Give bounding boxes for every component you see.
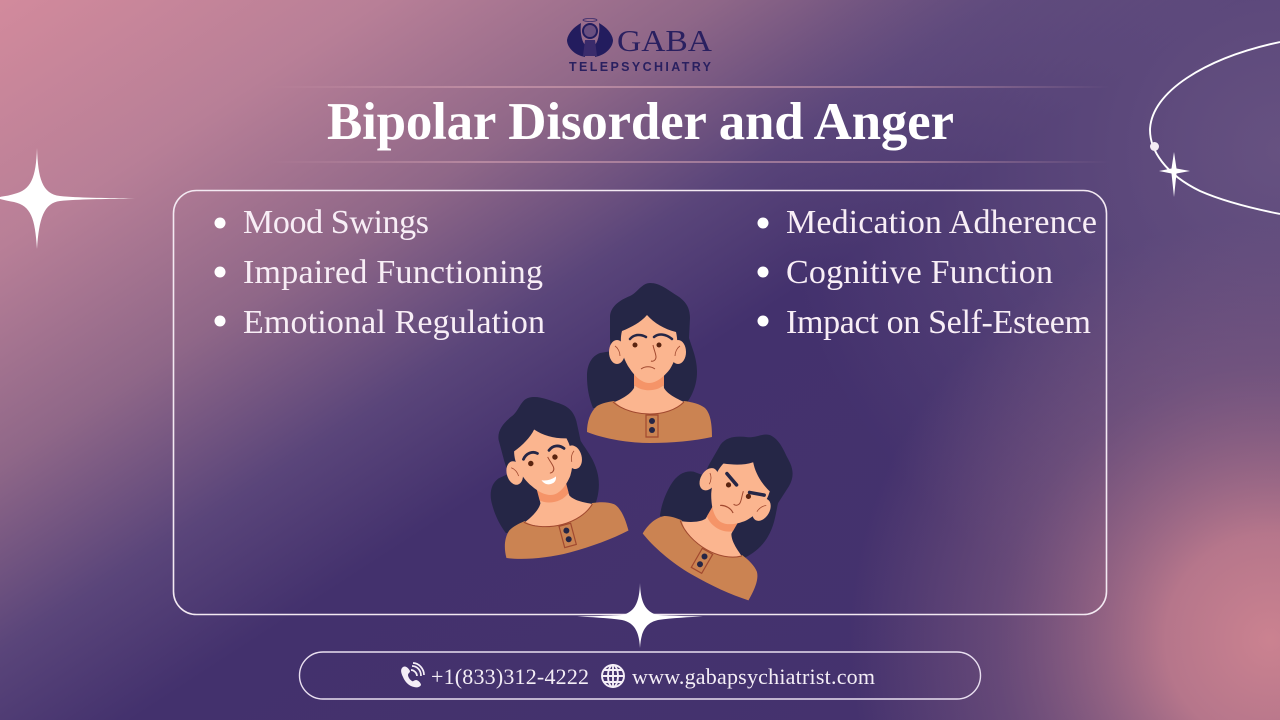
character: happy <box>468 382 630 569</box>
bullet item: Mood Swings: Mood Swings <box>243 204 429 241</box>
icon: globe <box>602 665 624 687</box>
title: Bipolar Disorder and Anger <box>327 93 954 151</box>
phone number: +1(833)312-4222 <box>431 664 589 689</box>
bottom divider <box>270 161 1110 163</box>
top divider <box>270 86 1110 88</box>
logo: Gaba Telepsychiatry <box>567 18 713 74</box>
icon: phone <box>401 663 424 687</box>
bullet item: Medication Adherence: Medication Adherence <box>786 204 1097 241</box>
bullet item: Impaired Functioning: Impaired Functioning <box>243 254 543 291</box>
illustration: three moods <box>468 283 825 606</box>
character: angry <box>637 404 825 606</box>
contact pill <box>300 652 980 699</box>
icon: angel <box>567 18 613 57</box>
website: www.gabapsychiatrist.com <box>632 664 875 689</box>
decoration: bottom sparkle <box>577 583 703 648</box>
logo tagline: TELEPSYCHIATRY <box>569 60 712 74</box>
bullet item: Emotional Regulation: Emotional Regulation <box>243 304 545 341</box>
list: left column <box>214 204 545 341</box>
list: right column <box>758 204 1097 341</box>
decoration: orbit arc with sparkle <box>1150 42 1280 214</box>
character: sad <box>587 283 712 443</box>
logo wordmark: GABA <box>617 23 713 58</box>
contact bar <box>300 652 980 699</box>
bullet item: Cognitive Function: Cognitive Function <box>786 254 1053 291</box>
bullet item: Impact on Self-Esteem: Impact on Self-Esteem <box>786 304 1091 341</box>
decoration: left sparkle <box>0 148 135 249</box>
panel: content frame <box>174 190 1106 614</box>
